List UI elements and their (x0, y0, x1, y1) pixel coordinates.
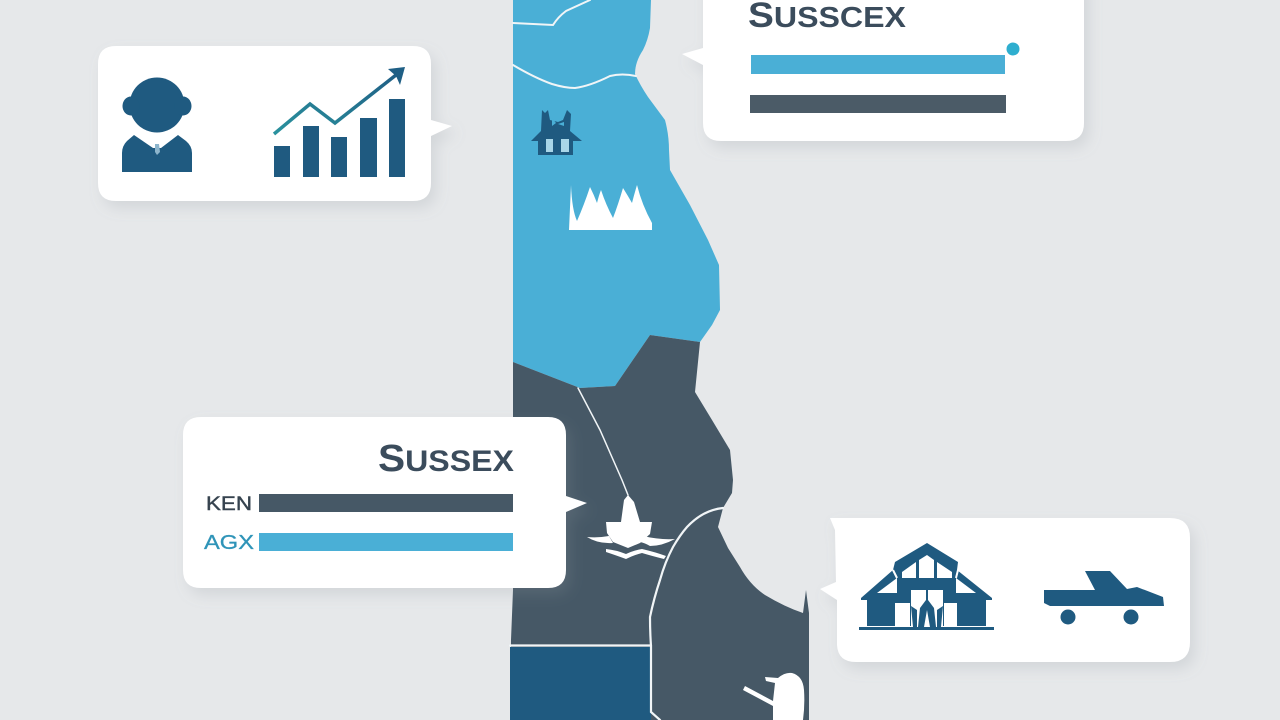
callout card (682, 0, 1084, 141)
icon: barn (859, 543, 994, 630)
callout card (183, 417, 587, 588)
callout card (98, 46, 452, 201)
blue bar (751, 55, 1005, 74)
bar: KEN (259, 494, 513, 512)
icon: house on map (531, 110, 582, 155)
bar: AGX (259, 533, 513, 551)
panel: barn and truck callout (820, 518, 1190, 662)
icon: white mountains on map (569, 185, 652, 230)
map: blue northern counties (513, 0, 720, 388)
panel: growth callout (98, 46, 452, 201)
icon: white bird on map (743, 673, 804, 720)
heading: SUSSEX (378, 438, 514, 480)
label: AGX: AGX (204, 532, 254, 554)
marker dot (1006, 42, 1020, 56)
panel: Sussex callout (183, 417, 587, 588)
bar chart with rising arrow (274, 67, 405, 177)
map: county boundary lines (510, 0, 723, 720)
map of the region (510, 0, 809, 720)
icon: pickup truck (1044, 571, 1164, 624)
icon: white boat on map (587, 495, 675, 559)
panel: Susscex callout (682, 0, 1084, 141)
dark bar (750, 95, 1006, 113)
map: navy county block (510, 647, 651, 720)
label: KEN: KEN (206, 494, 252, 515)
map: dark southern counties (510, 335, 809, 720)
icon: business person (122, 78, 192, 172)
callout card (820, 518, 1190, 662)
